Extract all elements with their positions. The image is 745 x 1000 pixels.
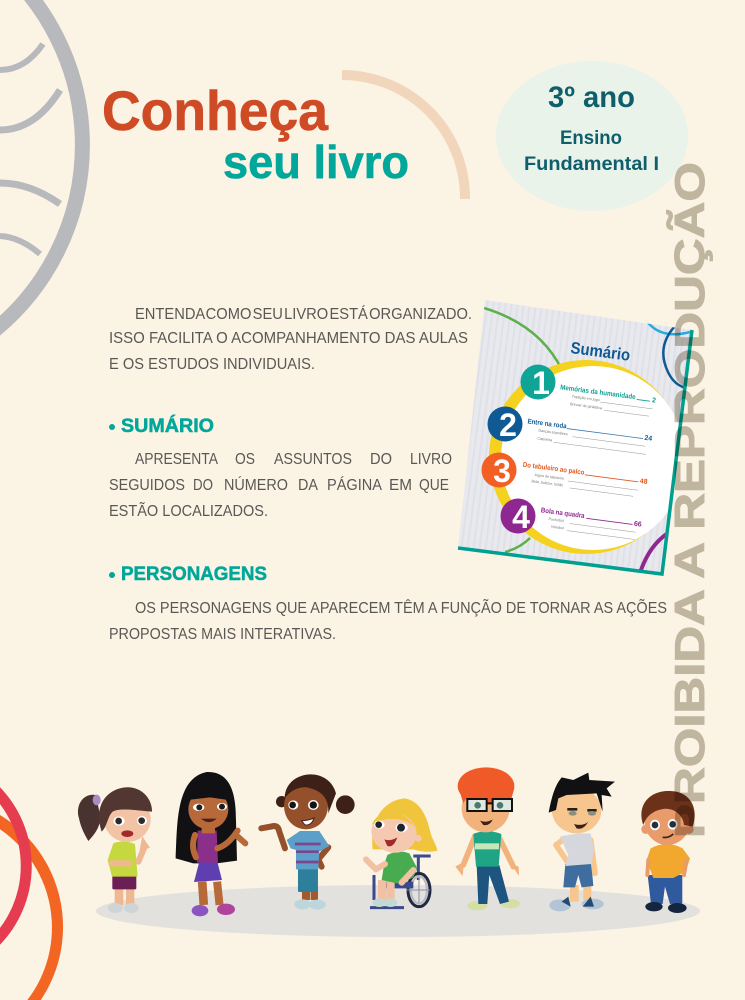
sumário text block: ESTÃO LOCALIZADOS. xyxy=(109,503,268,520)
chapter list xyxy=(521,384,656,540)
sumário text block: SEGUIDOS xyxy=(109,477,185,494)
heading: sumário on book: Sumário xyxy=(569,339,631,365)
heading: personagens: PERSONAGENS xyxy=(121,564,267,585)
chapter 3: Jogos de tabuleiro xyxy=(534,473,564,481)
chapter 2: Capoeira xyxy=(537,436,553,442)
ground shadow ellipse xyxy=(96,885,700,937)
chapter 2: Danças populares xyxy=(538,429,568,436)
personagens text block xyxy=(109,600,667,643)
chapter 2 xyxy=(525,418,653,455)
chapter 1: Brincar de ginástica xyxy=(570,402,603,410)
chapter 3: 48 xyxy=(639,478,648,486)
chapter 2: 24 xyxy=(644,435,653,443)
green arcs xyxy=(484,308,562,552)
intro text block: ISSO FACILITA O ACOMPANHAMENTO DAS AULAS xyxy=(109,330,468,347)
grade badge: 3º ano xyxy=(548,81,635,114)
intro text block: E OS ESTUDOS INDIVIDUAIS. xyxy=(109,356,315,373)
chapter 1: Tradição em jogo xyxy=(572,395,600,402)
grade badge: Fundamental I xyxy=(524,154,659,175)
personagens text block: PROPOSTAS MAIS INTERATIVAS. xyxy=(109,626,336,643)
chapter 4 xyxy=(539,507,642,540)
grade badge: Ensino xyxy=(560,128,622,149)
yellow ring xyxy=(489,360,685,554)
title: seu livro xyxy=(223,136,409,188)
chapter 1: 2 xyxy=(652,397,656,405)
title: Conheça xyxy=(102,79,329,142)
decorative red and orange arcs bottom left xyxy=(0,790,63,1000)
personagens text block: OS PERSONAGENS QUE APARECEM TÊM A FUNÇÃO DE TORNAR AS AÇÕES xyxy=(135,600,667,617)
grade badge xyxy=(496,61,688,211)
character: girl with curly hair xyxy=(261,774,355,910)
chapter badges: 4 xyxy=(512,499,530,535)
sumário text block xyxy=(109,451,452,520)
book page: table of contents xyxy=(458,300,692,574)
chapter 4: Punhobol xyxy=(548,517,564,523)
heading: sumário: SUMÁRIO xyxy=(121,415,214,437)
characters group xyxy=(78,767,695,916)
title xyxy=(102,79,409,188)
chapter 1 xyxy=(558,384,656,417)
sumário text block: EM xyxy=(389,477,412,494)
sumário text block: ASSUNTOS xyxy=(274,451,352,468)
character: girl with long black hair xyxy=(176,772,245,916)
sumário text block: QUE xyxy=(419,477,449,494)
decorative beige arc xyxy=(342,75,465,199)
sumário text block: DO xyxy=(193,477,213,494)
chapter 3: Bola, boliche, bolão xyxy=(531,479,563,487)
intro text block xyxy=(109,306,472,373)
character: boy with brown hair xyxy=(641,791,695,913)
character: girl in wheelchair xyxy=(366,798,437,908)
sumário text block: LIVRO xyxy=(410,451,452,468)
sumário text block: DO xyxy=(370,451,392,468)
sumário text block: APRESENTA xyxy=(135,451,219,468)
chapter badges: 2 xyxy=(499,407,517,443)
wheelchair xyxy=(370,856,431,908)
character: girl with ponytail xyxy=(78,787,152,913)
chapter 3: Do tabuleiro ao palco xyxy=(522,462,585,477)
character: boy with red hair and glasses xyxy=(455,767,520,910)
character: boy with black spiky hair xyxy=(549,773,615,911)
chapter 4: Voleibol xyxy=(551,525,564,530)
sumário text block: OS xyxy=(235,451,255,468)
purple arc xyxy=(641,533,668,570)
decorative grey circle top left xyxy=(0,0,82,330)
chapter 1: Memórias da humanidade xyxy=(560,384,636,401)
chapter 4: Bola na quadra xyxy=(540,507,585,520)
sumário text block: NÚMERO xyxy=(224,477,288,494)
blue arcs xyxy=(646,320,690,388)
chapter 2: Entre na roda xyxy=(527,418,567,430)
sumário text block: DA xyxy=(298,477,319,494)
teal book edge xyxy=(458,330,692,574)
sumário text block: PÁGINA xyxy=(327,477,383,494)
chapter badges: 1 xyxy=(532,365,550,401)
chapter 3 xyxy=(521,462,648,498)
chapter 4: 66 xyxy=(633,521,642,529)
intro text block: ENTENDA COMO SEU LIVRO ESTÁ ORGANIZADO. xyxy=(135,306,472,323)
chapter badges: 3 xyxy=(493,453,511,489)
watermark: PROIBIDA A REPRODUÇÃO xyxy=(666,162,713,838)
chapter badges xyxy=(482,364,556,535)
